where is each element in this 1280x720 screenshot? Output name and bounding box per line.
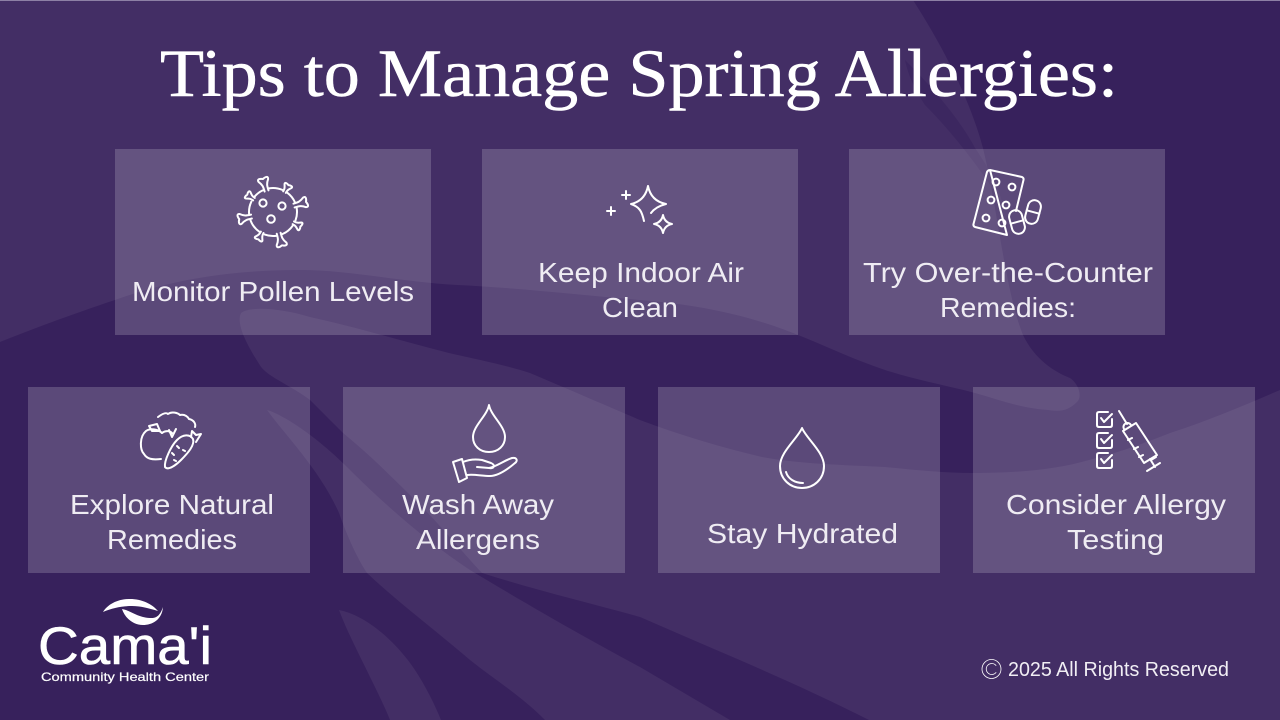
logo tagline: Community Health Center — [41, 670, 209, 684]
card: Explore Natural Remedies: Remedies — [107, 524, 237, 555]
card: Consider Allergy Testing: Testing — [1067, 524, 1164, 555]
card: Try Over-the-Counter Remedies: Remedies: — [940, 292, 1076, 323]
label: Consider Allergy — [1006, 489, 1226, 520]
label: Wash Away — [402, 489, 554, 520]
label: Explore Natural — [70, 489, 274, 520]
icon: virus — [237, 177, 308, 248]
card: Consider Allergy Testing — [973, 387, 1255, 573]
logo wordmark: Cama'i — [38, 617, 212, 676]
label: Keep Indoor Air — [538, 257, 744, 288]
logo mark — [103, 599, 163, 625]
label: Stay Hydrated — [707, 518, 898, 549]
icon: checklist and syringe — [1097, 411, 1160, 471]
copyright text: 2025 All Rights Reserved — [1008, 658, 1229, 681]
card: Wash Away Allergens — [343, 387, 625, 573]
copyright symbol — [982, 660, 1001, 678]
card: Keep Indoor Air Clean: Clean — [602, 292, 678, 323]
icon: pills — [973, 170, 1042, 235]
label: Monitor Pollen Levels — [132, 276, 414, 307]
icon: water drop — [780, 428, 824, 488]
card: Explore Natural Remedies — [28, 387, 310, 573]
title: Tips to Manage Spring Allergies: — [160, 35, 1118, 111]
card: Wash Away Allergens: Allergens — [416, 524, 540, 555]
label: Try Over-the-Counter — [863, 257, 1153, 288]
card: Monitor Pollen Levels — [115, 149, 431, 335]
icon: drop over hand — [453, 405, 517, 482]
icon: fruit and vegetables — [141, 412, 201, 468]
card: Try Over-the-Counter Remedies — [849, 149, 1165, 335]
icon: sparkles — [607, 186, 672, 233]
card: Stay Hydrated — [658, 387, 940, 573]
copyright — [982, 658, 1229, 681]
logo — [38, 599, 212, 684]
card: Keep Indoor Air Clean — [482, 149, 798, 335]
